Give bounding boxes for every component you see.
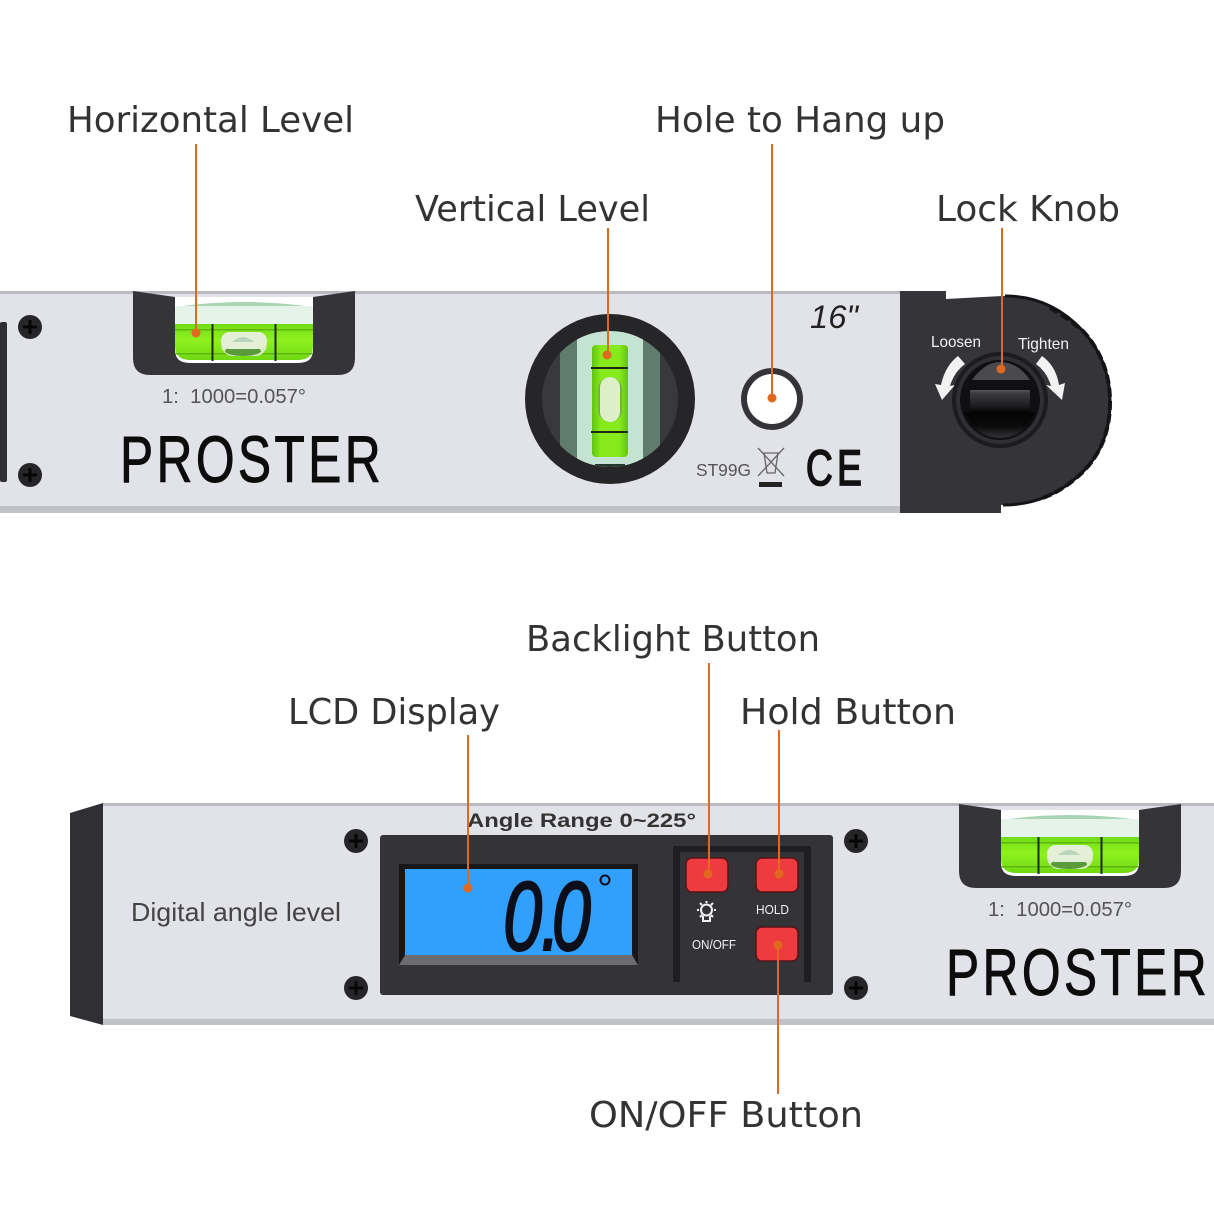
leader: Lock Knob (996, 228, 1006, 374)
backlight button (686, 858, 728, 892)
leader: Hold Button (774, 730, 784, 878)
end cap (70, 803, 103, 1025)
arrow: tighten (1036, 356, 1065, 400)
label: Backlight Button: Backlight Button (526, 619, 820, 660)
label: ON/OFF Button: ON/OFF Button (589, 1095, 863, 1136)
lock knob (952, 352, 1048, 448)
leader: Backlight Button (704, 663, 712, 878)
label: Hole to Hang up: Hole to Hang up (655, 100, 945, 141)
icon: backlight bulb (697, 901, 716, 921)
leader: Vertical Level (602, 228, 612, 360)
panel: bottom level body (103, 803, 1214, 1025)
leader: ON/OFF Button (774, 940, 782, 1094)
size mark: 16" (810, 299, 860, 335)
LCD reading: 0.0 (503, 863, 591, 972)
hold button (756, 858, 798, 892)
label: Hold Button: Hold Button (740, 692, 956, 733)
leader: LCD Display (464, 735, 472, 892)
label: LCD Display: LCD Display (288, 692, 500, 733)
icon: upper screw (18, 315, 42, 339)
accuracy text: 1: 1000=0.057° (162, 386, 306, 408)
panel: top level body (0, 291, 902, 513)
icon: screw top left (344, 829, 368, 853)
icon: screw bottom left (344, 976, 368, 1000)
arrow: loosen (935, 356, 965, 400)
vertical vial (525, 314, 695, 484)
icon: lower screw (18, 463, 42, 487)
label: HOLD: HOLD (756, 903, 789, 917)
hanging hole (741, 368, 803, 430)
degree mark (600, 876, 610, 884)
horizontal vial (133, 291, 355, 375)
label: Loosen: Loosen (931, 334, 981, 351)
model number: ST99G (696, 460, 751, 480)
display edge at left of top level (0, 322, 7, 482)
horizontal vial, bottom level (959, 804, 1181, 888)
CE mark: CE (806, 441, 866, 496)
accuracy text, bottom level: 1: 1000=0.057° (988, 899, 1132, 921)
label: Vertical Level: Vertical Level (415, 189, 650, 230)
icon: screw top right (844, 829, 868, 853)
brand name, bottom level: PROSTER (946, 936, 1210, 1010)
icon: screw bottom right (844, 976, 868, 1000)
leader: Hole to Hang up (768, 144, 776, 402)
label: Lock Knob: Lock Knob (936, 189, 1120, 230)
label: Tighten: Tighten (1018, 336, 1069, 353)
panel: lock knob housing (900, 291, 1110, 513)
label: ON/OFF: ON/OFF (692, 938, 736, 952)
device label: Digital angle level (131, 897, 341, 927)
leader: Horizontal Level (192, 144, 200, 338)
on/off button (756, 927, 798, 961)
brand name: PROSTER (120, 423, 384, 497)
angle range text: Angle Range 0~225° (467, 811, 696, 832)
label: Horizontal Level: Horizontal Level (67, 100, 354, 141)
button panel (673, 846, 811, 982)
panel: LCD housing (380, 835, 833, 995)
icon: crossed-out bin (758, 448, 784, 487)
LCD screen (399, 863, 638, 972)
